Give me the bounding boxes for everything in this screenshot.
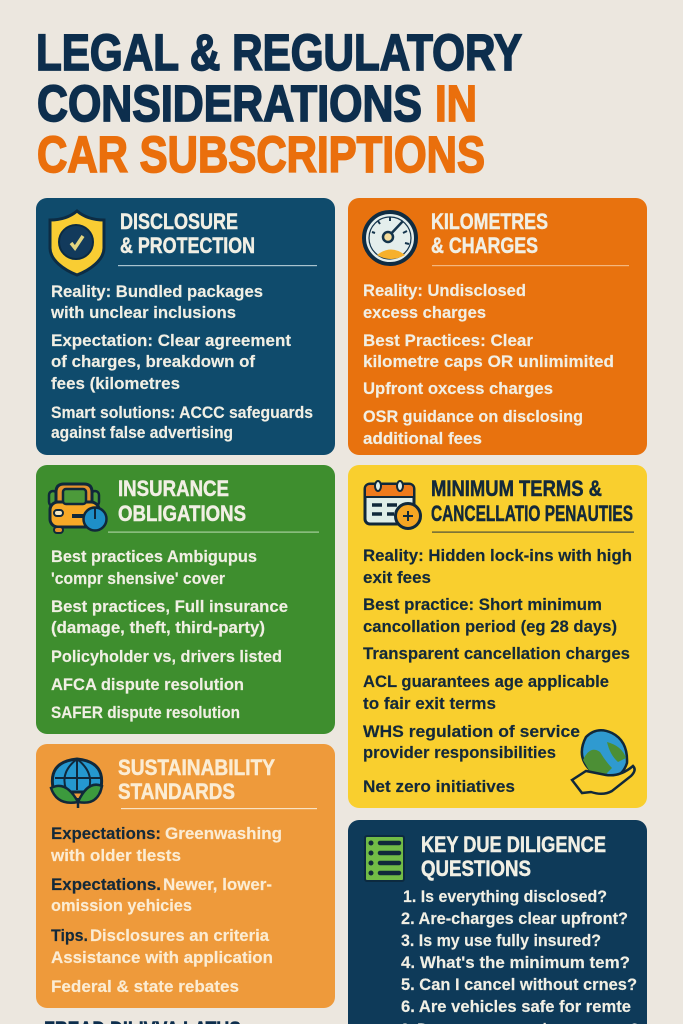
heading: disclosure and protection: & PROTECTION [120, 233, 255, 258]
title: LEGAL & REGULATORY [36, 24, 522, 81]
text: minimum terms body: Reality: Hidden lock-ins with high [363, 546, 632, 565]
icon: hand holding globe [572, 730, 635, 794]
icon: speedometer [364, 212, 416, 264]
heading: sustainability standards [118, 755, 275, 804]
text: numbered questions: 4. What's the minimum tem? [401, 953, 630, 972]
text: sustainability body: Newer, lower- [163, 875, 272, 894]
text: numbered questions: 2. Are-charges clear upfront? [401, 909, 628, 928]
text: sustainability body: with older tlests [50, 846, 181, 865]
heading: key due diligence questions [421, 832, 606, 881]
text: sustainability body [50, 824, 282, 996]
text: kilometres body: Reality: Undisclosed [363, 281, 526, 300]
icon: calendar [365, 481, 420, 528]
text: sustainability body: Tips. [51, 926, 88, 945]
heading: key due diligence questions: QUESTIONS [421, 856, 531, 881]
panel: kilometres and charges [348, 198, 647, 455]
heading: kilometres and charges: KILOMETRES [431, 209, 548, 234]
text: insurance body: 'compr shensive' cover [51, 569, 225, 588]
icon: shield [50, 211, 104, 275]
icon: car with badge [49, 484, 106, 533]
text: disclosure body: Expectation: Clear agreement [51, 331, 291, 350]
text: minimum terms body: to fair exit terms [363, 694, 496, 713]
text: insurance body: Best practices, Full insurance [51, 597, 288, 616]
title: CONSIDERATIONS [37, 75, 422, 132]
text: kilometres body: Upfront oxcess charges [363, 379, 553, 398]
panel: minimum terms and cancellation penalties [348, 465, 647, 808]
text: insurance body: SAFER dispute resolution [51, 703, 240, 722]
text: minimum terms body: exit fees [363, 568, 431, 587]
text: kilometres body: excess charges [363, 303, 486, 322]
text: disclosure body: with unclear inclusions [50, 303, 236, 322]
title: IN [435, 75, 477, 132]
text: minimum terms body [363, 546, 632, 796]
heading: disclosure and protection [120, 209, 255, 258]
icon: checklist [365, 836, 404, 881]
text: insurance body: AFCA dispute resolution [51, 675, 244, 694]
text: sustainability body: Disclosures an criteria [90, 926, 270, 945]
text: minimum terms body: cancollation period (eg 28 days) [363, 617, 617, 636]
panel: insurance obligations [36, 465, 335, 734]
title [36, 24, 522, 183]
panel: disclosure and protection [36, 198, 335, 455]
text: sustainability body: Assistance with application [51, 948, 273, 967]
panel: key due diligence questions [348, 820, 647, 1024]
heading: minimum terms: MINIMUM TERMS & [431, 476, 602, 501]
text: sustainability body: Greenwashing [165, 824, 282, 843]
icon: globe with leaves [51, 759, 102, 808]
text: sustainability body: Expectations: [51, 824, 161, 843]
heading: sustainability standards: STANDARDS [118, 779, 235, 804]
text: sustainability body: Federal & state rebates [51, 977, 239, 996]
heading: insurance obligations [118, 476, 246, 526]
text: disclosure body: of charges, breakdown of [51, 352, 255, 371]
text: numbered questions: 5. Can I cancel without crnes? [401, 975, 637, 994]
text: disclosure body: fees (kilometres [51, 374, 180, 393]
heading: insurance obligations: INSURANCE [118, 476, 229, 501]
text: disclosure body: against false advertising [51, 423, 233, 442]
heading: key due diligence questions: KEY DUE DILIGENCE [421, 832, 606, 857]
text: numbered questions: 6. Are vehicles safe for remte [401, 997, 631, 1016]
text: kilometres body: additional fees [363, 429, 482, 448]
heading: insurance obligations: OBLIGATIONS [118, 501, 246, 526]
text: kilometres body: kilometre caps OR unlimimited [363, 352, 614, 371]
text: numbered questions [401, 887, 639, 1024]
text: insurance body: Best practices Ambigupus [51, 547, 257, 566]
heading: sustainability standards: SUSTAINABILITY [118, 755, 275, 780]
text: kilometres body [363, 281, 614, 448]
text: insurance body: (damage, theft, third-party) [51, 618, 265, 637]
text: sustainability body: Expectations. [51, 875, 161, 894]
text: minimum terms body: WHS regulation of service [363, 722, 580, 741]
text: minimum terms body: provider responsibilities [363, 743, 556, 762]
title: CAR SUBSCRIPTIONS [37, 126, 485, 183]
text: insurance body [51, 547, 288, 722]
text: disclosure body: Smart solutions: ACCC safeguards [51, 403, 313, 422]
text: minimum terms body: ACL guarantees age applicable [363, 672, 609, 691]
heading: minimum terms [431, 476, 633, 526]
text: numbered questions: 3. Is my use fully insured? [401, 931, 601, 950]
text: insurance body: Policyholder vs, drivers listed [51, 647, 282, 666]
text: disclosure body: Reality: Bundled packages [51, 282, 263, 301]
text: disclosure body [50, 282, 313, 442]
panel: sustainability standards [36, 744, 335, 1008]
text: minimum terms body: Net zero initiatives [363, 777, 515, 796]
text: kilometres body: Best Practices: Clear [363, 331, 533, 350]
heading: disclosure and protection: DISCLOSURE [120, 209, 238, 234]
text: kilometres body: OSR guidance on disclosing [363, 407, 583, 426]
text: numbered questions: 1. Is everything disclosed? [403, 887, 607, 906]
heading: kilometres and charges: & CHARGES [431, 233, 538, 258]
text: minimum terms body: Transparent cancellation charges [363, 644, 630, 663]
text: sustainability body: omission yehicies [51, 896, 192, 915]
heading: kilometres and charges [431, 209, 548, 258]
text: minimum terms body: Best practice: Short minimum [363, 595, 602, 614]
